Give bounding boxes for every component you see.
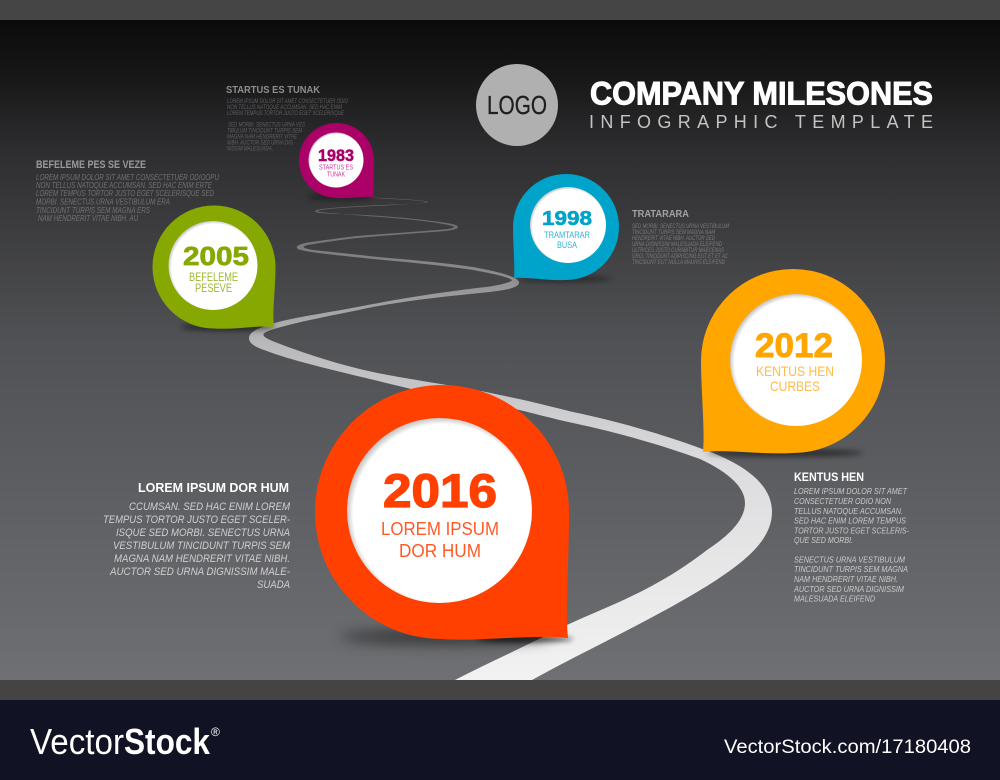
text block: 2005 befeleme pes se veze: BEFELEME PES SE VEZE [36,159,146,171]
text block: 2016 lorem ipsum dor hum: VESTIBULUM TINCIDUNT TURPIS SEM [113,540,291,552]
text block: 2012 kentus hen: SED HAC ENIM LOREM TEMPUS [794,516,906,526]
text block: 2005 befeleme pes se veze: MORBI. SENECTUS URNA VESTIBULUM ERA [36,198,170,206]
text block: 2012 kentus hen: QUE SED MORBI. [794,535,853,545]
text block: 2012 kentus hen: SENECTUS URNA VESTIBULUM [794,554,906,564]
pin: 2005 green: PESEVE [195,281,232,295]
text block: 2012 kentus hen: AUCTOR SED URNA DIGNISSIM [793,584,905,594]
pin: 1983 magenta: 1983 [318,147,354,165]
pin: 2005 green [152,205,276,330]
text block: 1998 tratarara [632,209,729,266]
text block: 2012 kentus hen: LOREM IPSUM DOLOR SIT AMET [794,486,908,496]
text block: 1983 startus es tunak: NISSIM MALESUADA. [227,146,273,152]
pin: 2016 red: 2016 [383,464,497,517]
text block: 1998 tratarara: TINCIDUNT ELIT NULLA MAURIS ELEIFEND [632,260,725,266]
text block: 1998 tratarara: URNA DIGNISSIM MALESUADA ELEIFEND [632,242,722,248]
text block: 1998 tratarara: TRATARARA [632,209,689,220]
pin: 2005 green: BEFELEME [189,270,238,284]
text block: 2016 lorem ipsum dor hum: SUADA [257,579,290,591]
text block: 1983 startus es tunak: NON TELLUS NATOQUE ACCUMSAN. SED HAC ENIM [227,105,342,111]
text block: 1998 tratarara: ORCI. TINCIDUNT ADIPISCING ELIT ET ET AC [632,254,728,260]
text block: 2012 kentus hen: MALESUADA ELEIFEND [794,594,875,604]
text block: 2012 kentus hen: NAM HENDRERIT VITAE NIBH. [794,574,898,584]
text block: 2005 befeleme pes se veze: NON TELLUS NATOQUE ACCUMSAN. SED HAC ENIM ERTE [36,181,213,190]
text block: 2016 lorem ipsum dor hum: AUCTOR SED URNA DIGNISSIM MALE- [109,566,290,578]
text block: 2005 befeleme pes se veze: TINCIDUNT TURPIS SEM MAGNA ERS [36,206,151,215]
footer bar: VectorStock.com/17180408 [724,737,971,758]
text block: 2012 kentus hen: KENTUS HEN [794,472,864,484]
pin: 2005 green: 2005 [183,243,249,271]
footer bar: Stock [124,721,211,762]
text block: 1983 startus es tunak [226,84,348,152]
pin: 2016 red: LOREM IPSUM [381,518,499,539]
pin: 2016 red: DOR HUM [399,540,481,561]
pin: 1983 magenta: TUNAK [327,172,345,178]
text block: 2005 befeleme pes se veze: NAM HENDRERIT VITAE NIBH. AU [38,214,138,223]
bottom band [0,680,1000,700]
text block: 2016 lorem ipsum dor hum: LOREM IPSUM DOR HUM [138,480,289,495]
footer bar: ® [211,725,220,739]
logo badge: LOGO [487,90,547,120]
pin: 1998 blue: TRAMTARAR [544,230,590,240]
text block: 2005 befeleme pes se veze [36,159,219,223]
text block: 2016 lorem ipsum dor hum: TEMPUS TORTOR JUSTO EGET SCELER- [103,514,290,526]
text block: 1983 startus es tunak: SED MORBI. SENECTUS URNA VES [228,122,305,128]
text block: 2012 kentus hen: CONSECTETUER ODIO NON [794,496,892,506]
text block: 2012 kentus hen [793,472,909,604]
text block: 1998 tratarara: ULTRICES JUSTO CURABITUR MAECENAS [632,248,724,254]
top band [0,0,1000,20]
text block: 2012 kentus hen: TINCIDUNT TURPIS SEM MAGNA [794,564,908,574]
text block: 1983 startus es tunak: STARTUS ES TUNAK [226,84,320,96]
text block: 1998 tratarara: TINCIDUNT TURPIS SEM MAGNA NAM [632,230,715,236]
text block: 1983 startus es tunak: TIBULUM TINCIDUNT TURPIS SEM [227,128,302,134]
pin: 1998 blue [513,174,619,282]
pin: 2012 orange: 2012 [755,327,833,365]
footer bar [0,700,1000,780]
text block: 1998 tratarara: SED MORBI. SENECTUS URNA VESTIBULUM [632,224,729,230]
text block: 2016 lorem ipsum dor hum: CCUMSAN. SED HAC ENIM LOREM [129,501,291,513]
footer bar: Vector [30,721,124,762]
text block: 2012 kentus hen: TELLUS NATOQUE ACCUMSAN. [794,506,903,516]
winding timeline road [249,198,772,680]
text block: 2012 kentus hen: TORTOR JUSTO EGET SCELERIS- [794,526,909,536]
text block: 1983 startus es tunak: LOREM IPSUM DOLOR SIT AMET CONSECTETUER ODIO [227,99,348,105]
pin: 2012 orange: CURBES [770,378,820,394]
text block: 1983 startus es tunak: LOREM TEMPUS TORTOR JUSTO EGET SCELERISQUE [227,111,345,117]
text block: 2016 lorem ipsum dor hum: MAGNA NAM HENDRERIT VITAE NIBH. [114,553,290,565]
title block: INFOGRAPHIC TEMPLATE [589,112,933,132]
pin: 1983 magenta [299,123,374,200]
pin: 2016 red [315,385,573,643]
text block: 2005 befeleme pes se veze: LOREM IPSUM DOLOR SIT AMET CONSECTETUER ODIOOPU [36,173,219,182]
text block: 1983 startus es tunak: NIBH. AUCTOR SED URNA DIG [227,140,293,146]
logo badge [476,64,558,146]
text block: 2005 befeleme pes se veze: LOREM TEMPUS TORTOR JUSTO EGET SCELERISQUE SED [36,189,214,198]
pin: 2012 orange [701,269,885,456]
text block: 1983 startus es tunak: MAGNA NAM HENDRERIT VITAE [227,134,298,140]
pin: 1998 blue: BUSA [557,240,577,250]
pin: 1998 blue: 1998 [542,207,592,230]
text block: 2016 lorem ipsum dor hum: ISQUE SED MORBI. SENECTUS URNA [116,527,290,539]
title block [589,76,933,132]
title block: COMPANY MILESONES [590,76,933,112]
text block: 1998 tratarara: HENDRERIT VITAE NIBH. AUCTOR SED [632,236,715,242]
pin: 2012 orange: KENTUS HEN [756,363,834,379]
pin: 1983 magenta: STARTUS ES [319,164,353,172]
text block: 2016 lorem ipsum dor hum [103,480,291,591]
